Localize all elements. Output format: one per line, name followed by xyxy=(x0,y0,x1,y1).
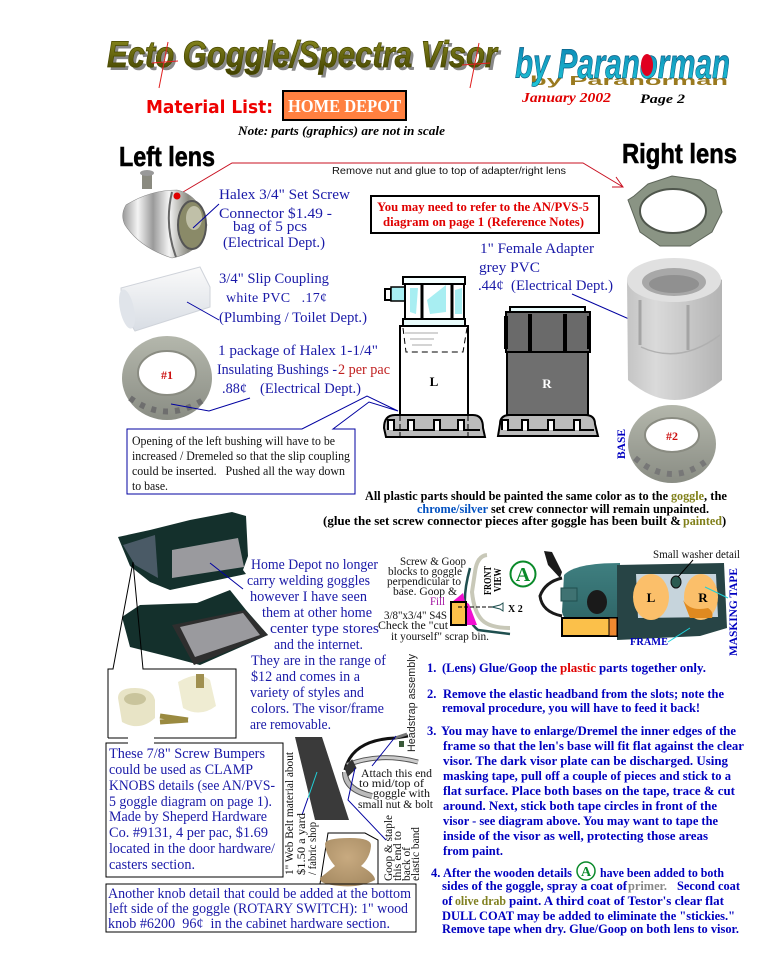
text: home depot goggles: variety of styles and xyxy=(250,685,365,701)
step 4: Second coat xyxy=(677,879,741,893)
step 3: frame so that the len's base will fit flat against the clear xyxy=(443,739,744,753)
panel: rotary switch knob: knob #6200 96¢ in the cabinet hardware section. xyxy=(108,916,390,932)
text: bushing: 1 package of Halex 1-1/4" xyxy=(218,343,378,359)
callout lines: goggle to bumpers xyxy=(108,562,236,738)
icon: bushing #1: #1 xyxy=(161,368,173,382)
step 4: paint. A third coat of Testor's clear flat xyxy=(509,894,725,908)
diagram: right lens assembly: R xyxy=(542,376,552,391)
diagram: goggle with masking tape: L xyxy=(647,590,656,605)
panel: screw bumpers xyxy=(106,743,283,877)
step 3: masking tape, pull off a couple of pieces and stick to a xyxy=(443,769,732,783)
step 4: Remove tape when dry. Glue/Goop on both lens to visor. xyxy=(442,922,739,936)
headstrap attach note xyxy=(358,766,434,811)
diagram: headstrap xyxy=(345,734,418,840)
photo: web belt xyxy=(295,737,349,820)
text: slip coupling: white PVC .17¢ xyxy=(226,291,327,306)
front view note: Fill xyxy=(430,594,446,608)
diagram: left lens assembly xyxy=(384,277,485,437)
panel: screw bumpers: KNOBS details (see AN/PVS- xyxy=(109,778,275,794)
text: set screw connector: Connector $1.49 - xyxy=(219,206,332,222)
front view note: perpendicular to xyxy=(387,574,461,588)
panel: rotary switch knob: Another knob detail that could be added at the bottom xyxy=(108,886,412,902)
goop and staple note xyxy=(381,815,422,881)
front view label: X 2 xyxy=(508,604,523,615)
step 2: Remove the elastic headband from the slots; note the xyxy=(443,687,724,701)
step 4: of xyxy=(442,894,453,908)
text: slip coupling: (Plumbing / Toilet Dept.) xyxy=(219,310,367,326)
step 4: A xyxy=(581,865,592,880)
web belt label: $1.50 a yard xyxy=(294,813,308,875)
paint note: goggle xyxy=(671,489,704,503)
washer label: Small washer detail xyxy=(653,547,741,561)
text: bushing xyxy=(217,343,390,397)
diagram: goggle with masking tape xyxy=(540,551,728,642)
text: home depot goggles: $12 and comes in a xyxy=(251,669,361,685)
text: home depot goggles: them at other home xyxy=(262,605,372,621)
step 4: primer. xyxy=(628,879,667,893)
front view label: FRONT xyxy=(482,566,494,595)
front view label: VIEW xyxy=(492,568,504,592)
paint note xyxy=(323,489,727,528)
callout: left bushing: to base. xyxy=(132,479,168,493)
goop and staple note: elastic band xyxy=(408,827,422,881)
front view note: base. Goop & xyxy=(393,584,458,598)
text: bushing: 2 per pac xyxy=(338,362,390,378)
paint note: painted xyxy=(683,514,722,528)
step 1: 1. xyxy=(427,661,436,675)
step 3: You may have to enlarge/Dremel the inner edges of the xyxy=(441,724,736,738)
text: home depot goggles: They are in the range of xyxy=(251,653,386,669)
text: set screw connector: (Electrical Dept.) xyxy=(223,235,325,251)
icon: bushing #2: #2 xyxy=(666,429,678,443)
paint note: (glue the set screw connector pieces after goggle has been built & xyxy=(323,514,681,528)
front view note xyxy=(378,554,489,643)
panel: screw bumpers: casters section. xyxy=(109,857,195,873)
text: female adapter: grey PVC xyxy=(479,260,540,276)
front view note: blocks to goggle xyxy=(388,564,462,578)
text: set screw connector xyxy=(219,187,351,251)
panel: rotary switch knob xyxy=(106,884,416,932)
text: bushing: Insulating Bushings - xyxy=(217,362,337,378)
front view note: 3/8"x3/4" S4S xyxy=(384,608,447,622)
arrow: nut to right lens xyxy=(178,163,623,195)
date: January 2002 xyxy=(521,91,611,106)
front view note: Check the "cut xyxy=(378,618,449,632)
goop and staple note: this end to xyxy=(390,831,404,881)
text: home depot goggles: center type stores xyxy=(270,621,379,637)
step 4: have been added to both xyxy=(600,866,724,880)
text: home depot goggles: however I have seen xyxy=(250,589,368,605)
diagram: left lens assembly: L xyxy=(430,374,439,389)
headstrap attach note: small nut & bolt xyxy=(358,797,434,811)
front view label xyxy=(482,566,523,615)
text: set screw connector: bag of 5 pcs xyxy=(233,219,307,235)
step 3: from paint. xyxy=(443,844,503,858)
photo: screw bumpers xyxy=(118,674,216,726)
left lens heading: Left lens xyxy=(119,141,215,172)
right lens heading: Right lens xyxy=(622,138,737,169)
icon: set screw connector xyxy=(123,170,219,258)
panel: screw bumpers: Made by Sheperd Hardware xyxy=(109,809,267,825)
step 4: 4. xyxy=(431,866,440,880)
text: home depot goggles: are removable. xyxy=(250,717,331,733)
masking tape label: MASKING TAPE xyxy=(728,568,740,656)
text: female adapter: 1" Female Adapter xyxy=(480,241,594,257)
step 3: 3. xyxy=(427,724,436,738)
web belt label: / fabric shop xyxy=(305,822,319,875)
front view note: Screw & Goop xyxy=(400,554,466,568)
reference note box xyxy=(371,196,599,233)
panel: rotary switch knob: left side of the goggle (ROTARY SWITCH): 1" wood xyxy=(109,901,409,917)
title xyxy=(107,34,502,88)
text: home depot goggles: carry welding goggles xyxy=(247,573,370,589)
step 2 xyxy=(427,687,724,715)
title: Ecto Goggle/Spectra Visor xyxy=(107,34,499,75)
text: female adapter xyxy=(478,241,661,333)
diagram: right lens assembly xyxy=(498,307,598,436)
title: Ecto Goggle/Spectra Visor xyxy=(110,37,502,78)
text: bushing: .88¢ xyxy=(222,381,247,397)
step 1: (Lens) Glue/Goop the xyxy=(442,661,557,675)
panel: screw bumpers: could be used as CLAMP xyxy=(109,762,253,778)
arrow label: Remove nut and glue to top of adapter/right lens xyxy=(332,166,566,177)
callout: left bushing: could be inserted. Pushed all the way down xyxy=(132,464,346,478)
step 4: After the wooden details xyxy=(443,866,572,880)
photo: welding goggles xyxy=(118,512,268,665)
text: female adapter: .44¢ (Electrical Dept.) xyxy=(478,278,613,294)
text: bushing: (Electrical Dept.) xyxy=(260,381,361,397)
paint note: All plastic parts should be painted the same color as to the xyxy=(365,489,668,503)
text: home depot goggles: colors. The visor/frame xyxy=(251,701,384,717)
step 1: parts together only. xyxy=(599,661,706,675)
paint note: set crew connector will remain unpainted. xyxy=(491,502,709,516)
diagram: goggle with masking tape: R xyxy=(698,590,708,605)
front view note: it yourself" scrap bin. xyxy=(391,629,489,643)
text: set screw connector: Halex 3/4" Set Screw xyxy=(219,187,351,203)
goop and staple note: Goop & staple xyxy=(381,815,395,881)
step 4 xyxy=(431,862,741,936)
icon: slip coupling xyxy=(116,267,219,331)
callout: left bushing xyxy=(127,396,398,494)
reference note box: diagram on page 1 (Reference Notes) xyxy=(383,214,584,229)
panel: screw bumpers: located in the door hardware/ xyxy=(109,841,276,857)
step 3: visor - see diagram above. You may want to tape the xyxy=(443,814,718,828)
material list heading: Material List: xyxy=(146,97,273,118)
step 3 xyxy=(427,724,744,858)
headstrap attach note: goggle with xyxy=(373,786,430,800)
callout: left bushing: Opening of the left bushing will have to be xyxy=(132,434,335,448)
headstrap attach note: Attach this end xyxy=(361,766,432,780)
web belt label xyxy=(282,751,319,875)
byline logo: by Paranorman xyxy=(530,73,728,88)
step 2: removal procedure, you will have to feed it back! xyxy=(442,701,700,715)
base label: BASE xyxy=(616,429,628,459)
callout: left bushing: increased / Dremeled so that the slip coupling xyxy=(132,449,351,463)
step 3: visor. The dark visor plate can be discharged. Using xyxy=(443,754,729,768)
frame label: FRAME xyxy=(630,636,668,648)
step 3: around. Next, stick both tape circles in front of the xyxy=(443,799,717,813)
icon: A marker: A xyxy=(516,564,531,586)
paint note: chrome/silver xyxy=(417,502,488,516)
step 3: inside of the visor as well, protecting those areas xyxy=(443,829,708,843)
text: slip coupling: 3/4" Slip Coupling xyxy=(219,271,329,287)
icon: bushing #1 xyxy=(122,336,250,420)
headstrap attach note: to mid/top of xyxy=(359,776,424,790)
paint note: , the xyxy=(704,489,727,503)
text: home depot goggles: Home Depot no longer xyxy=(251,557,378,573)
goop and staple note: back of xyxy=(399,847,413,881)
home depot badge xyxy=(283,91,406,120)
step 4: sides of the goggle, spray a coat of xyxy=(442,879,628,893)
step 2: 2. xyxy=(427,687,436,701)
text: slip coupling xyxy=(219,271,367,326)
step 1 xyxy=(427,661,706,675)
panel: screw bumpers: These 7/8" Screw Bumpers xyxy=(109,746,265,762)
text: home depot goggles xyxy=(247,557,386,733)
reference note box: You may need to refer to the AN/PVS-5 xyxy=(377,199,589,214)
photo: wood knob with outline xyxy=(320,833,378,886)
icon: metal lock nut xyxy=(628,176,722,246)
panel: screw bumpers: 5 goggle diagram on page 1). xyxy=(109,794,272,810)
step 4: DULL COAT may be added to eliminate the "stickies." xyxy=(442,909,735,923)
icon: bushing #2 xyxy=(628,405,716,483)
panel: screw bumpers: Co. #9131, 4 per pac, $1.69 xyxy=(109,825,268,841)
page number: Page 2 xyxy=(640,91,686,106)
icon: A marker xyxy=(510,562,536,586)
paint note: ) xyxy=(722,514,726,528)
note: Note: parts (graphics) are not in scale xyxy=(237,124,445,138)
step 4: olive drab xyxy=(455,894,506,908)
headstrap assembly label: Headstrap assembly xyxy=(406,654,418,752)
step 1: plastic xyxy=(560,661,596,675)
home depot badge: HOME DEPOT xyxy=(288,96,401,116)
diagram: front view of goggle xyxy=(451,555,510,634)
step 3: flat surface. Place both bases on the tape, trace & cut xyxy=(443,784,736,798)
web belt label: 1" Web Belt material about xyxy=(282,751,296,875)
text: home depot goggles: and the internet. xyxy=(274,637,363,653)
icon: female adapter xyxy=(627,258,722,400)
